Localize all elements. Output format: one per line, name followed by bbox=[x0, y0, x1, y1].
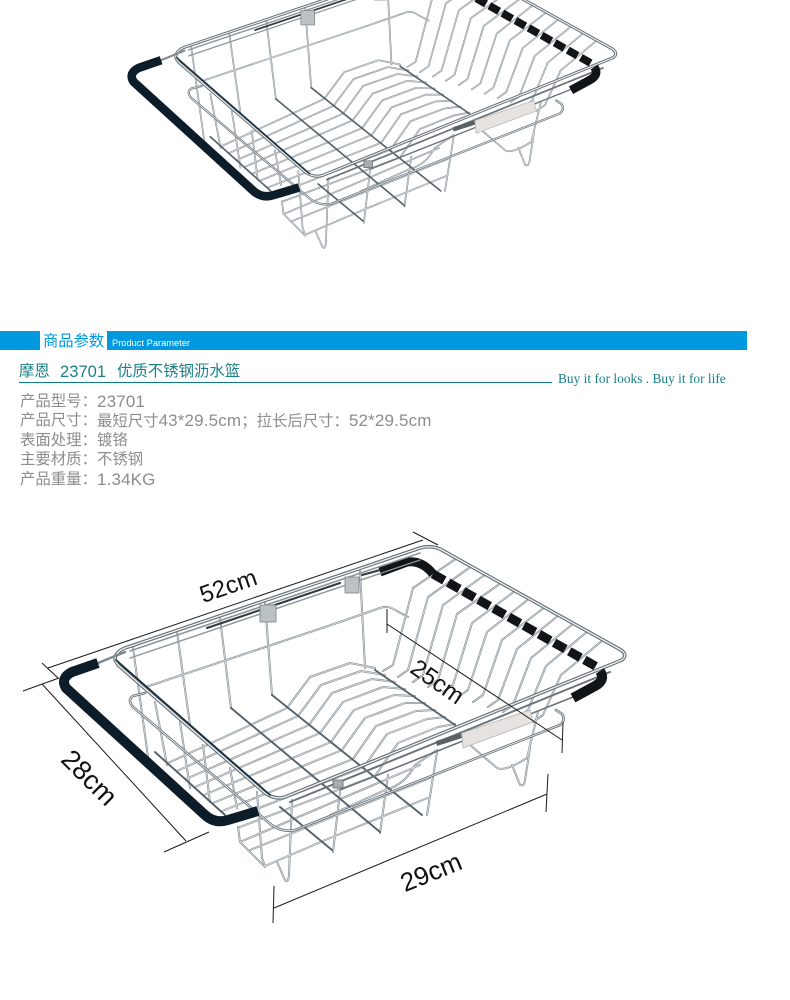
black handle: far bbox=[573, 671, 602, 698]
label: 29cm: 29cm bbox=[396, 846, 466, 898]
dimension line: 29cm bbox=[273, 774, 548, 923]
spec: size: 最短尺寸43*29.5cm；拉长后尺寸：52*29.5cm bbox=[97, 411, 432, 430]
spec: weight: 1.34KG bbox=[97, 470, 156, 489]
spec: material: 不锈钢 bbox=[97, 451, 143, 468]
telescoping tube bbox=[98, 652, 125, 663]
section header band bbox=[0, 331, 747, 350]
product title: 23701 bbox=[60, 362, 106, 381]
product title: 优质不锈钢沥水篮 bbox=[117, 363, 240, 380]
product photo: dish basket, upper view bbox=[132, 0, 616, 248]
spec: finish: 表面处理： bbox=[20, 432, 97, 449]
lower outer loop bbox=[130, 693, 564, 831]
dimension lines bbox=[23, 532, 563, 923]
spec: model: 23701 bbox=[97, 392, 145, 411]
rim bbox=[115, 547, 625, 802]
spec: finish bbox=[20, 432, 128, 449]
dimension line: 52cm bbox=[42, 532, 438, 678]
spec: weight bbox=[20, 470, 156, 489]
title rule bbox=[19, 382, 552, 383]
black rubber band on far side bbox=[380, 562, 597, 667]
product photo: dish basket, lower dimensioned view bbox=[64, 547, 625, 881]
slider and clips bbox=[260, 577, 533, 788]
spec: material: 主要材质： bbox=[20, 451, 97, 468]
dimension line: 28cm bbox=[23, 678, 209, 852]
spec: model bbox=[20, 392, 145, 411]
product title: 摩恩 bbox=[19, 363, 50, 380]
heading: Product Parameter: Product Parameter bbox=[112, 338, 190, 348]
label: 52cm: 52cm bbox=[196, 564, 261, 609]
tagline: Buy it for looks . Buy it for life bbox=[558, 371, 726, 386]
spec: material bbox=[20, 450, 143, 468]
spec: model: 产品型号： bbox=[20, 393, 97, 410]
product title bbox=[19, 362, 240, 381]
label: 28cm: 28cm bbox=[55, 744, 123, 812]
spec: finish: 镀铬 bbox=[97, 432, 128, 449]
floor cross bars bbox=[155, 670, 455, 850]
heading: 商品参数: 商品参数 bbox=[43, 333, 104, 350]
spec: size: 产品尺寸： bbox=[20, 412, 97, 429]
label: 25cm: 25cm bbox=[405, 654, 469, 710]
spec: weight: 产品重量： bbox=[20, 471, 97, 488]
black handle: near bbox=[64, 663, 258, 821]
dimension line: 25cm bbox=[387, 609, 563, 753]
